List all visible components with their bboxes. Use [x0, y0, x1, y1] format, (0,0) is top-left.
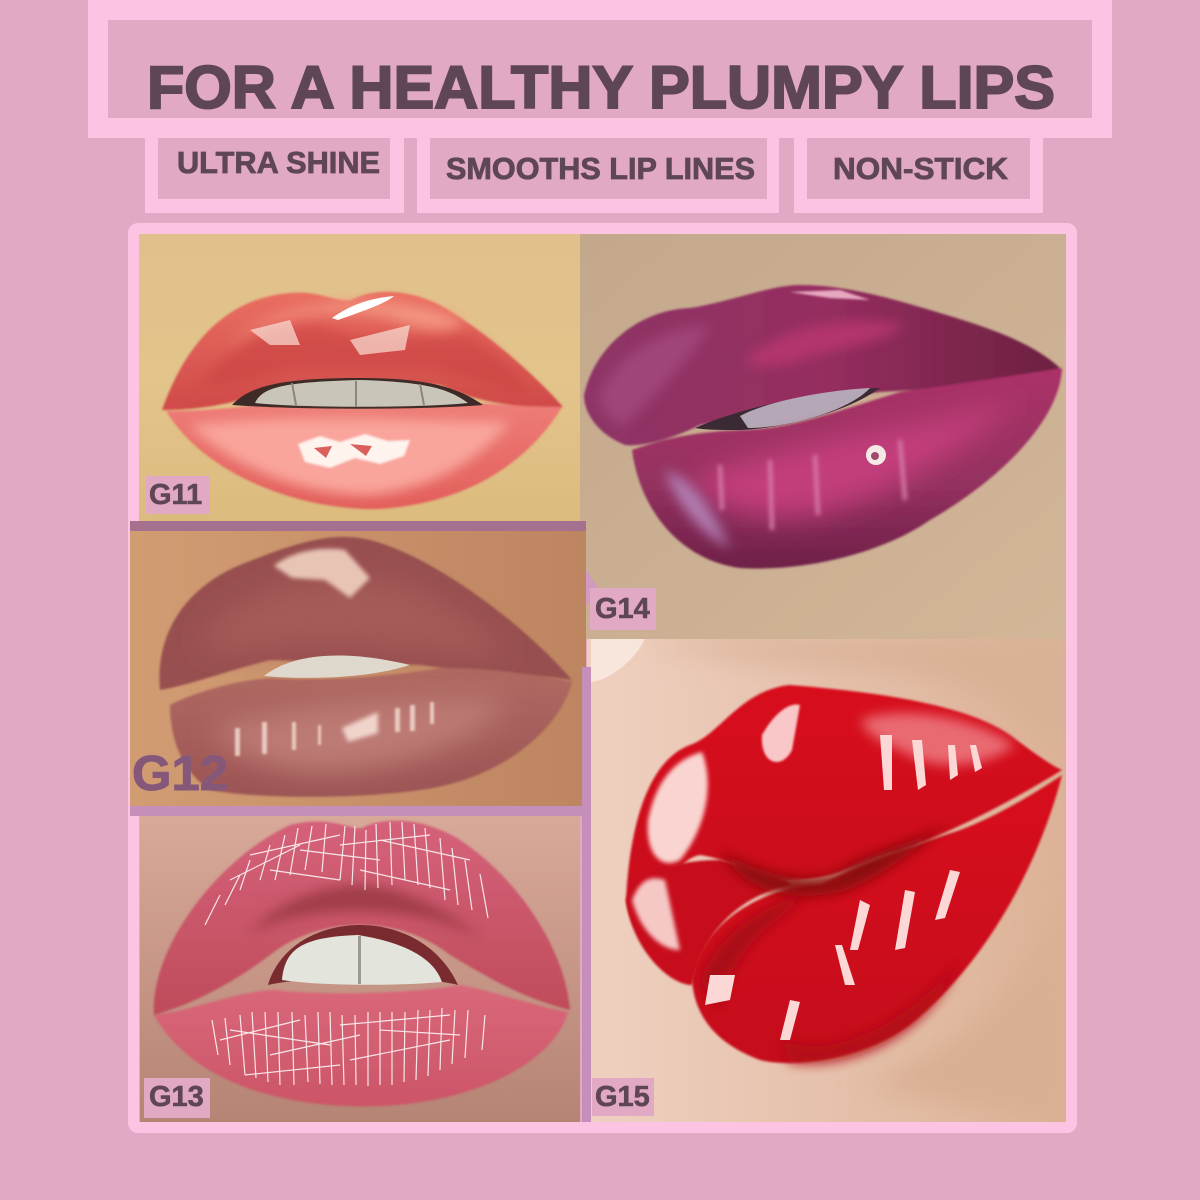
G15 label tag	[592, 1078, 654, 1116]
label: G14: G14	[595, 593, 650, 625]
photo: G12 mauve lips	[130, 531, 586, 806]
badge: non-stick: NON-STICK	[833, 151, 1009, 186]
frame notch at bottom of divider	[580, 1122, 598, 1132]
photo panel frame	[128, 223, 1077, 1133]
photo: G14 plum lips	[580, 234, 1066, 639]
badge: smooths lip lines	[417, 138, 779, 213]
title: FOR A HEALTHY PLUMPY LIPS	[147, 54, 1055, 121]
badge: smooths lip lines: SMOOTHS LIP LINES	[446, 151, 755, 186]
divider under G11	[130, 521, 586, 531]
label: G15: G15	[595, 1081, 650, 1113]
wedge at G14 lower left	[586, 570, 606, 606]
badge: ultra shine: ULTRA SHINE	[177, 145, 380, 180]
photo: G15 red lips	[587, 639, 1066, 1122]
photo: G13 pink lips	[140, 816, 580, 1122]
badge: ultra shine	[145, 138, 404, 213]
photo: G11 coral lips	[139, 234, 580, 521]
label: G11: G11	[149, 479, 202, 511]
badge: non-stick	[794, 138, 1043, 213]
divider under G12	[130, 806, 582, 816]
title banner	[88, 0, 1112, 138]
label: G12: G12	[132, 747, 228, 801]
G14 label tag	[590, 588, 656, 630]
vertical divider beside G12 and G13	[582, 667, 591, 1122]
label: G13: G13	[149, 1081, 204, 1113]
